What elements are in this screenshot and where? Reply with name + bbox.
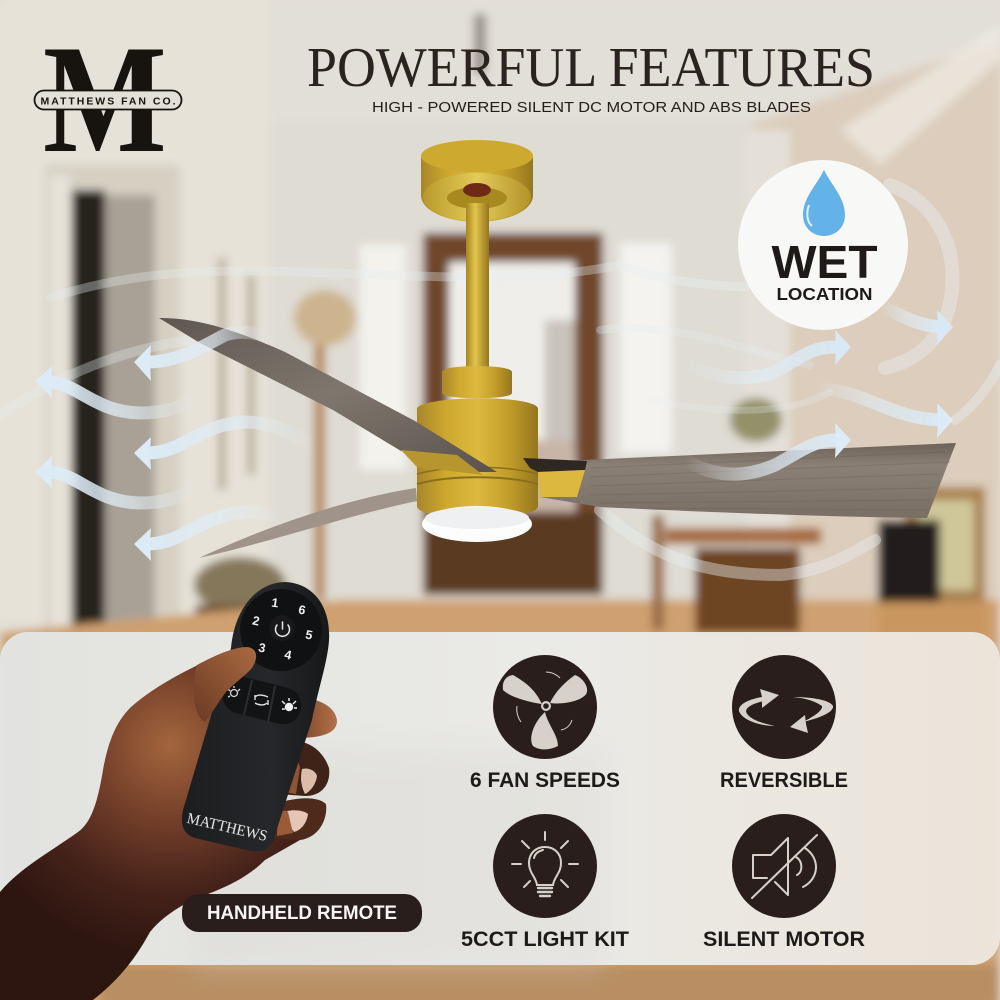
- downrod: [466, 203, 489, 369]
- index finger: [296, 698, 337, 738]
- remote dial: [240, 589, 322, 671]
- left arrow 1: [134, 332, 270, 381]
- icon: fan blades: [503, 672, 587, 749]
- floor: [0, 600, 1000, 1000]
- badge: wet location: [738, 160, 908, 330]
- feature: 6 fan speeds: [470, 655, 620, 792]
- wet text: WET: [772, 236, 878, 288]
- feature: silent motor: [703, 814, 865, 951]
- dim light icon: [228, 686, 240, 697]
- icon: rotation arrows: [739, 689, 833, 733]
- pendant stem: [474, 14, 486, 74]
- right arrow 1: [680, 330, 851, 378]
- right arrow 3: [810, 389, 953, 438]
- reverse icon: [255, 695, 268, 705]
- remote brand text: MATTHEWS: [185, 810, 269, 845]
- remote body: [182, 582, 329, 852]
- left arrow 5: [134, 512, 285, 561]
- airflow bands: [0, 185, 1000, 575]
- 5cct label: 5CCT LIGHT KIT: [461, 928, 629, 951]
- icon: muted speaker: [752, 835, 817, 898]
- location text: LOCATION: [776, 284, 872, 304]
- right table: [665, 528, 821, 544]
- arm and palm: [0, 664, 300, 1000]
- right wall: [750, 40, 1000, 640]
- speed numbers: 5: [304, 627, 314, 643]
- feature: 5cct light kit: [461, 814, 629, 951]
- middle finger: [278, 741, 329, 796]
- sidelight windows: [360, 245, 406, 470]
- logo monogram M: M: [43, 13, 167, 185]
- fan: [159, 140, 956, 558]
- speed numbers: 3: [257, 640, 267, 656]
- right arrow 2: [880, 305, 953, 345]
- bright light icon: [282, 698, 297, 710]
- left arrow 3: [134, 422, 315, 470]
- blade brackets: [401, 450, 483, 475]
- icon: light bulb: [512, 832, 578, 896]
- lower left blade: [199, 488, 417, 558]
- speed numbers: 1: [271, 596, 279, 610]
- 6 fan speeds label: 6 FAN SPEEDS: [470, 769, 620, 792]
- logo band: MATTHEWS FAN CO.: [40, 96, 176, 108]
- speed numbers: 2: [251, 613, 261, 629]
- remote buttons: [219, 673, 305, 728]
- wall art: [218, 258, 226, 490]
- speed numbers: 6: [297, 602, 307, 618]
- motor housing: [417, 398, 538, 518]
- hat and stand: [294, 290, 356, 346]
- upper left blade: [159, 318, 497, 472]
- reversible label: REVERSIBLE: [720, 769, 848, 792]
- ceiling canopy: [421, 140, 533, 222]
- thumb: [194, 647, 256, 722]
- power icon: [276, 622, 290, 636]
- speed numbers: [251, 596, 314, 663]
- right frame and chair: [905, 487, 985, 605]
- silent motor label: SILENT MOTOR: [703, 928, 865, 951]
- panel: translucent feature panel: [0, 632, 1000, 970]
- left doorway: [45, 165, 180, 635]
- left arrow 2: [35, 366, 200, 413]
- label pill: handheld remote: HANDHELD REMOTE: [207, 903, 397, 924]
- feature: reversible: [720, 655, 848, 792]
- left arrow 4: [35, 456, 200, 503]
- plants: [194, 557, 286, 613]
- label pill: handheld remote: [182, 894, 422, 932]
- logo band: [34, 90, 182, 110]
- left wall: [0, 0, 270, 620]
- right arrow 4: [685, 423, 851, 474]
- subtitle: HIGH - POWERED SILENT DC MOTOR AND ABS BLADES: [372, 100, 811, 116]
- door frame: [423, 233, 603, 595]
- logo: [34, 13, 182, 185]
- back wall: [270, 122, 750, 612]
- ring finger: [268, 798, 326, 840]
- right blade: [540, 443, 956, 518]
- ceiling: [0, 0, 1000, 125]
- hand holding remote: [0, 582, 337, 1000]
- icon: water drop: [803, 170, 845, 236]
- motor collar: [442, 366, 512, 398]
- title: POWERFUL FEATURES: [307, 37, 875, 99]
- speed numbers: 4: [283, 647, 293, 663]
- light kit: [422, 506, 532, 542]
- wind arrows: [35, 305, 953, 561]
